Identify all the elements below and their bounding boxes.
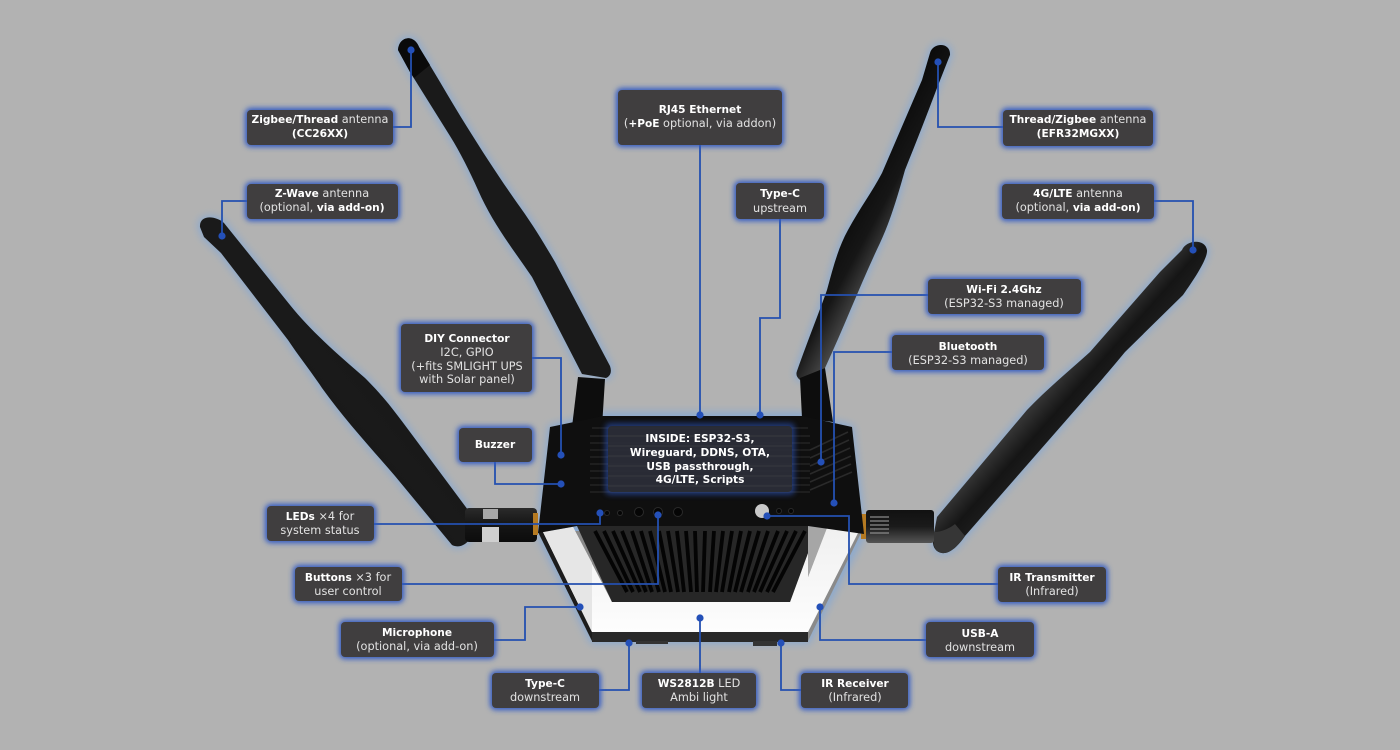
antenna: far left [200,217,538,546]
label: DIY Connector: (+fits SMLIGHT UPS [411,360,523,373]
label: Buttons [293,565,404,603]
label: USB-A [924,620,1036,659]
label: RJ45 Ethernet: RJ45 Ethernet [659,104,741,116]
label: Z-Wave antenna: (optional, via add-on) [259,201,385,214]
label: IR Receiver: (Infrared) [828,691,882,704]
antenna: far right [861,242,1207,553]
label: WS2812B LED: Ambi light [670,691,728,704]
label: DIY Connector: DIY Connector [424,333,510,345]
label: 4G/LTE antenna [1000,182,1156,221]
label: Microphone: (optional, via add-on) [356,640,478,653]
front vents [577,526,808,602]
leader lines and dots [218,46,1197,690]
label: Zigbee/Thread antenna: (CC26XX) [292,128,348,140]
label: Type-C upstream [734,181,826,221]
label: Buzzer [457,426,534,464]
top fins [590,428,810,492]
label: Bluetooth: (ESP32-S3 managed) [908,354,1028,367]
label: WS2812B LED [640,671,758,710]
label: Z-Wave antenna: Z-Wave antenna [275,187,369,200]
antenna base: top left [572,377,605,427]
label: Buzzer: Buzzer [475,439,516,451]
label: 4G/LTE antenna: 4G/LTE antenna [1033,187,1123,200]
label: Bluetooth [890,333,1046,372]
label: Type-C upstream: upstream [753,202,807,215]
label: Microphone [339,620,496,659]
front strip controls [604,508,794,516]
left rim [538,530,595,641]
top cover [538,416,864,534]
lower housing [538,531,862,641]
label: Wi-Fi 2.4Ghz: (ESP32-S3 managed) [944,297,1064,310]
label: USB-A: USB-A [962,628,999,640]
label: Type-C downstream [490,671,601,710]
label: RJ45 Ethernet [616,88,784,147]
label: IR Transmitter: IR Transmitter [1009,572,1095,584]
label: Type-C downstream: Type-C [525,678,565,690]
label: IR Transmitter: (Infrared) [1025,585,1079,598]
label: DIY Connector: with Solar panel) [419,373,515,386]
label: USB-A: downstream [945,641,1015,654]
label: Thread/Zigbee antenna: Thread/Zigbee antenna [1010,113,1146,126]
label: Type-C upstream: Type-C [760,188,800,200]
label: WS2812B LED: WS2812B LED [658,677,741,690]
IR lens [755,504,769,518]
panel: inside features: USB passthrough, [646,461,754,473]
connector: far left [465,508,538,542]
panel: inside features: Wireguard, DDNS, OTA, [630,447,770,459]
router body [538,416,864,646]
label: Z-Wave antenna [245,182,400,221]
panel: inside features: INSIDE: ESP32-S3, [645,433,755,445]
label: Wi-Fi 2.4Ghz [926,277,1083,316]
label: Thread/Zigbee antenna: (EFR32MGXX) [1037,128,1119,140]
antenna: top left [398,38,611,427]
label: Type-C downstream: downstream [510,691,580,704]
panel: inside features [605,423,795,495]
label: LEDs [265,504,376,543]
label: LEDs: LEDs ×4 for [286,510,355,523]
label: LEDs: system status [280,524,360,537]
label: Microphone: Microphone [382,627,452,639]
label: RJ45 Ethernet: (+PoE optional, via addon) [624,117,776,130]
label: IR Receiver: IR Receiver [821,678,890,690]
label: Buttons: user control [314,585,382,598]
label: IR Receiver [799,671,910,710]
label: Buttons: Buttons ×3 for [305,571,391,584]
white diffuser [543,527,858,632]
label: Zigbee/Thread antenna [245,108,395,147]
label: IR Transmitter [996,565,1108,604]
device glow [200,38,1207,642]
label: DIY Connector: I2C, GPIO [440,346,494,359]
antenna base: top right [800,368,833,422]
label: Wi-Fi 2.4Ghz: Wi-Fi 2.4Ghz [966,284,1042,296]
label: DIY Connector [399,322,534,394]
label: Bluetooth: Bluetooth [939,341,997,353]
antenna: top right [796,45,950,422]
panel: inside features: 4G/LTE, Scripts [656,474,744,486]
label: 4G/LTE antenna: (optional, via add-on) [1015,201,1141,214]
connector: far right [861,510,934,543]
bottom rim [592,632,808,642]
label: Zigbee/Thread antenna: Zigbee/Thread antenna [252,113,388,126]
label: Thread/Zigbee antenna [1001,108,1155,148]
